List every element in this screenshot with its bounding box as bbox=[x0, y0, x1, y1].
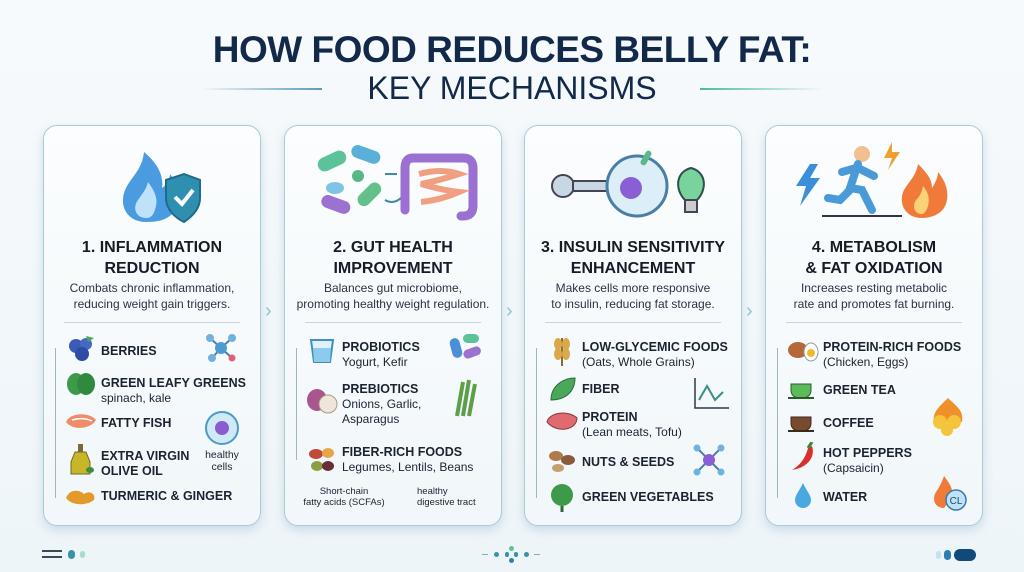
description: Makes cells more responsive bbox=[556, 281, 710, 295]
heading bbox=[541, 239, 725, 277]
item: low glycemic: (Oats, Whole Grains) bbox=[582, 355, 695, 369]
icon: fat cells burning bbox=[930, 396, 966, 436]
icon: chicken egg bbox=[786, 334, 820, 364]
icon: probiotic bacteria bbox=[450, 334, 481, 358]
icon: water drop bbox=[794, 482, 812, 508]
icon: spinach bbox=[67, 373, 95, 395]
item: low glycemic bbox=[582, 340, 728, 369]
panel: inflammation bbox=[43, 125, 261, 526]
item: berries: BERRIES bbox=[101, 344, 157, 358]
icon: oil bottle bbox=[70, 444, 94, 474]
icon: molecule purple bbox=[693, 444, 725, 476]
description bbox=[297, 281, 489, 311]
item: probiotics: Yogurt, Kefir bbox=[342, 355, 408, 369]
icon: beans bbox=[309, 448, 334, 471]
description: Combats chronic inflammation, bbox=[70, 281, 234, 295]
description: to insulin, reducing fat storage. bbox=[551, 297, 715, 311]
footnote: SCFAs: Short-chain bbox=[320, 486, 368, 497]
icon: blue flame with shield bbox=[122, 152, 201, 224]
label: healthy cells: healthy bbox=[205, 449, 239, 461]
item: turmeric: TURMERIC & GINGER bbox=[101, 489, 232, 503]
icon: fire CL: CL bbox=[950, 496, 963, 507]
footnote: digestive tract: healthy bbox=[417, 486, 448, 497]
item: low glycemic: LOW-GLYCEMIC FOODS bbox=[582, 340, 728, 354]
label: healthy cells bbox=[205, 449, 239, 473]
title: HOW FOOD REDUCES BELLY FAT: bbox=[213, 29, 811, 70]
item: prebiotics: Asparagus bbox=[342, 412, 399, 426]
icon: bacteria to intestine bbox=[318, 145, 478, 220]
icon: asparagus bbox=[455, 380, 477, 416]
footnote: digestive tract: digestive tract bbox=[417, 497, 476, 508]
item: leafy greens: spinach, kale bbox=[101, 391, 171, 405]
item: prebiotics bbox=[342, 382, 421, 426]
item: olive oil: OLIVE OIL bbox=[101, 464, 163, 478]
footnote: SCFAs bbox=[303, 486, 385, 508]
icon: key cell bulb bbox=[551, 150, 705, 218]
description: Balances gut microbiome, bbox=[324, 281, 462, 295]
icon: yogurt cup bbox=[310, 339, 334, 363]
icon: chili bbox=[790, 442, 818, 472]
item: water: WATER bbox=[823, 490, 867, 504]
heading: 4. METABOLISM bbox=[812, 239, 936, 256]
item: protein-rich: PROTEIN-RICH FOODS bbox=[823, 340, 961, 354]
item: prebiotics: PREBIOTICS bbox=[342, 382, 418, 396]
item: protein bbox=[582, 410, 682, 439]
item: leafy greens bbox=[101, 376, 246, 405]
item: hot peppers: (Capsaicin) bbox=[823, 461, 884, 475]
item: protein: PROTEIN bbox=[582, 410, 638, 424]
arrow: › bbox=[265, 300, 272, 322]
heading: REDUCTION bbox=[104, 260, 200, 277]
heading: 1. INFLAMMATION bbox=[82, 239, 222, 256]
arrow: › bbox=[746, 300, 753, 322]
item: coffee: COFFEE bbox=[823, 416, 874, 430]
panel: gut health bbox=[284, 125, 502, 526]
icon: line chart bbox=[694, 378, 729, 409]
description bbox=[70, 281, 234, 311]
description: promoting healthy weight regulation. bbox=[297, 297, 489, 311]
icon: berries bbox=[69, 336, 94, 361]
heading bbox=[766, 237, 982, 279]
heading: 2. GUT HEALTH bbox=[333, 239, 453, 256]
footer decoration center bbox=[482, 546, 542, 564]
icon: molecule bbox=[206, 334, 236, 362]
item: fiber-rich: Legumes, Lentils, Beans bbox=[342, 460, 473, 474]
item: protein-rich: (Chicken, Eggs) bbox=[823, 355, 908, 369]
icon: nuts bbox=[547, 448, 577, 476]
footnote: SCFAs: fatty acids (SCFAs) bbox=[303, 497, 385, 508]
panel: metabolism bbox=[765, 125, 983, 526]
item: leafy greens: GREEN LEAFY GREENS bbox=[101, 376, 246, 390]
footer decoration left bbox=[42, 550, 90, 560]
heading: & FAT OXIDATION bbox=[805, 260, 943, 277]
icon: greens bbox=[547, 482, 577, 512]
item: protein: (Lean meats, Tofu) bbox=[582, 425, 682, 439]
item: green vegetables: GREEN VEGETABLES bbox=[582, 490, 714, 504]
item: fiber-rich bbox=[342, 445, 473, 474]
icon: wheat bbox=[554, 338, 570, 366]
heading bbox=[333, 239, 453, 277]
item: hot peppers bbox=[823, 446, 912, 476]
label: healthy cells: cells bbox=[211, 461, 232, 473]
description bbox=[551, 281, 715, 311]
item: prebiotics: Onions, Garlic, bbox=[342, 397, 421, 411]
panel: insulin bbox=[524, 125, 742, 526]
item: olive oil bbox=[101, 449, 189, 478]
heading: IMPROVEMENT bbox=[333, 260, 453, 277]
item: green tea: GREEN TEA bbox=[823, 383, 896, 397]
icon: leaf bbox=[550, 378, 576, 400]
description: Increases resting metabolic bbox=[801, 281, 947, 295]
item: fatty fish: FATTY FISH bbox=[101, 416, 171, 430]
item: olive oil: EXTRA VIRGIN bbox=[101, 449, 189, 463]
icon: healthy cell bbox=[205, 411, 239, 445]
heading: ENHANCEMENT bbox=[571, 260, 695, 277]
icon: fire CL bbox=[930, 472, 970, 512]
icon: runner, lightning, fire bbox=[792, 136, 962, 226]
description bbox=[766, 280, 982, 312]
subtitle: KEY MECHANISMS bbox=[367, 70, 657, 106]
item: probiotics: PROBIOTICS bbox=[342, 340, 420, 354]
icon: turmeric bbox=[66, 490, 94, 504]
icon: coffee cup bbox=[788, 409, 818, 433]
item: nuts: NUTS & SEEDS bbox=[582, 455, 674, 469]
description: reducing weight gain triggers. bbox=[74, 297, 230, 311]
heading bbox=[82, 239, 222, 277]
description: rate and promotes fat burning. bbox=[794, 297, 954, 311]
icon: salmon bbox=[66, 414, 96, 428]
item: protein-rich bbox=[823, 340, 961, 370]
footer decoration right bbox=[936, 549, 984, 561]
icon: onion garlic bbox=[307, 389, 338, 414]
heading: 3. INSULIN SENSITIVITY bbox=[541, 239, 725, 256]
item: fiber-rich: FIBER-RICH FOODS bbox=[342, 445, 462, 459]
footnote: digestive tract bbox=[417, 486, 476, 508]
icon: meat bbox=[546, 412, 578, 430]
icon: tea cup bbox=[788, 376, 818, 400]
item: hot peppers: HOT PEPPERS bbox=[823, 446, 912, 460]
item: fiber: FIBER bbox=[582, 382, 620, 396]
arrow: › bbox=[506, 300, 513, 322]
item: probiotics bbox=[342, 340, 420, 369]
